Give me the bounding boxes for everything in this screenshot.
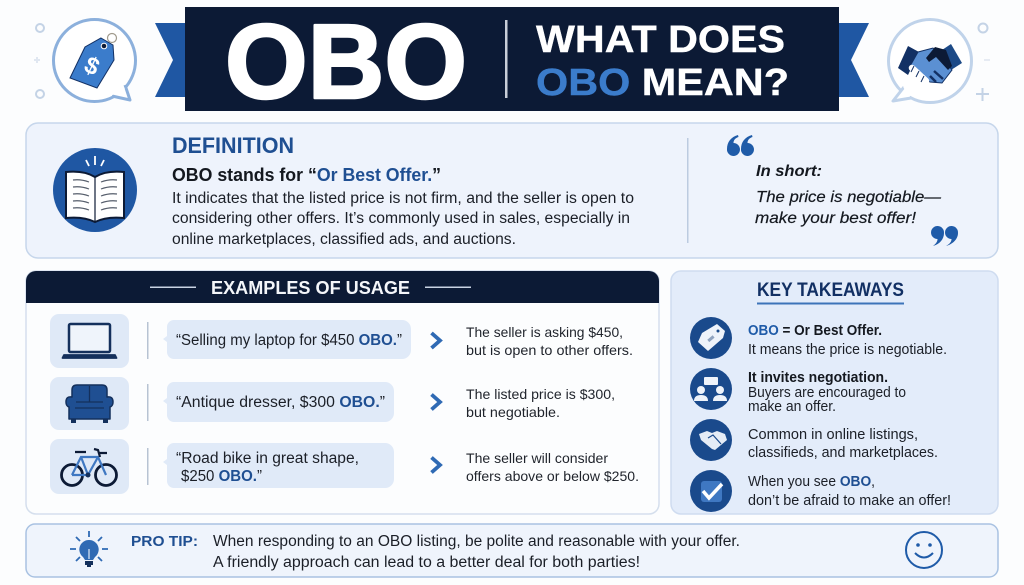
example row: armchair — [50, 377, 615, 430]
panel: examples of usage — [26, 271, 659, 514]
example row: bicycle: offers above or below $250. — [466, 468, 639, 484]
definition body: It indicates that the listed price is not firm, and the seller is open to — [172, 190, 634, 207]
takeaway 3 — [690, 419, 938, 461]
decorative sparkles right — [976, 24, 990, 101]
example row: bicycle: The seller will consider — [466, 450, 608, 466]
in short quote: The price is negotiable— — [756, 189, 942, 206]
quote mark open — [727, 135, 754, 156]
example row: armchair: “Antique dresser, $300 OBO.” — [176, 394, 385, 411]
takeaway 4 — [690, 470, 951, 512]
example row: armchair: but negotiable. — [466, 404, 560, 420]
icon: open book — [53, 148, 137, 232]
in short quote: In short: — [756, 163, 822, 180]
title: what does: WHAT DOES — [536, 19, 785, 61]
takeaway 1 — [690, 317, 947, 359]
header banner — [155, 3, 869, 121]
example row: laptop: The seller is asking $450, — [466, 324, 623, 340]
icon: price tag bubble — [54, 20, 136, 102]
title divider — [505, 20, 508, 98]
icon: price tag bubble: $ — [80, 51, 104, 82]
panel: key takeaways — [671, 271, 998, 514]
ribbon right — [838, 23, 869, 97]
icon: smiley — [906, 532, 942, 568]
icon: light bulb — [70, 531, 108, 567]
example row: bicycle: $250 OBO.” — [181, 468, 262, 485]
title: OBO mean: OBO MEAN? — [536, 62, 789, 104]
examples header — [26, 271, 659, 303]
label: pro tip: PRO TIP: — [131, 533, 198, 550]
example row: laptop: but is open to other offers. — [466, 342, 633, 358]
takeaway 2: It invites negotiation. — [748, 370, 888, 386]
takeaway 4: don’t be afraid to make an offer! — [748, 493, 951, 509]
definition body — [172, 190, 634, 248]
in short quote: make your best offer! — [755, 210, 917, 227]
in short quote — [755, 163, 942, 227]
pro tip text: A friendly approach can lead to a better deal for both parties! — [213, 554, 640, 571]
pro tip text: When responding to an OBO listing, be polite and reasonable with your offer. — [213, 533, 740, 550]
icon: handshake bubble — [888, 20, 972, 102]
example row: laptop — [50, 314, 633, 368]
takeaway 1: It means the price is negotiable. — [748, 342, 947, 358]
banner background — [185, 7, 839, 111]
title: OBO: OBO — [225, 3, 467, 121]
quote mark close — [931, 226, 958, 246]
heading: definition: DEFINITION — [172, 133, 294, 158]
takeaway 2 — [690, 368, 906, 415]
examples header: EXAMPLES OF USAGE — [211, 278, 410, 298]
takeaway 2: make an offer. — [748, 399, 836, 415]
takeaway 1: OBO = Or Best Offer. — [748, 323, 882, 339]
definition subheading: OBO stands for “Or Best Offer.” — [172, 164, 441, 185]
takeaway 3: Common in online listings, — [748, 427, 918, 443]
takeaway 2: Buyers are encouraged to — [748, 385, 906, 401]
panel: pro tip — [26, 524, 998, 577]
heading: key takeaways: KEY TAKEAWAYS — [757, 280, 904, 301]
example row: bicycle — [50, 439, 639, 494]
ribbon left — [155, 23, 186, 97]
example row: laptop: “Selling my laptop for $450 OBO.” — [176, 332, 402, 349]
panel: definition — [26, 123, 998, 258]
example row: armchair: The listed price is $300, — [466, 386, 615, 402]
decorative sparkles left — [34, 24, 44, 98]
definition body: considering other offers. It’s commonly used in sales, especially in — [172, 210, 630, 227]
definition body: online marketplaces, classified ads, and auctions. — [172, 231, 516, 248]
takeaway 4: When you see OBO, — [748, 474, 875, 490]
pro tip text — [213, 533, 740, 571]
takeaway 3: classifieds, and marketplaces. — [748, 445, 938, 461]
example row: bicycle: “Road bike in great shape, — [176, 450, 359, 467]
